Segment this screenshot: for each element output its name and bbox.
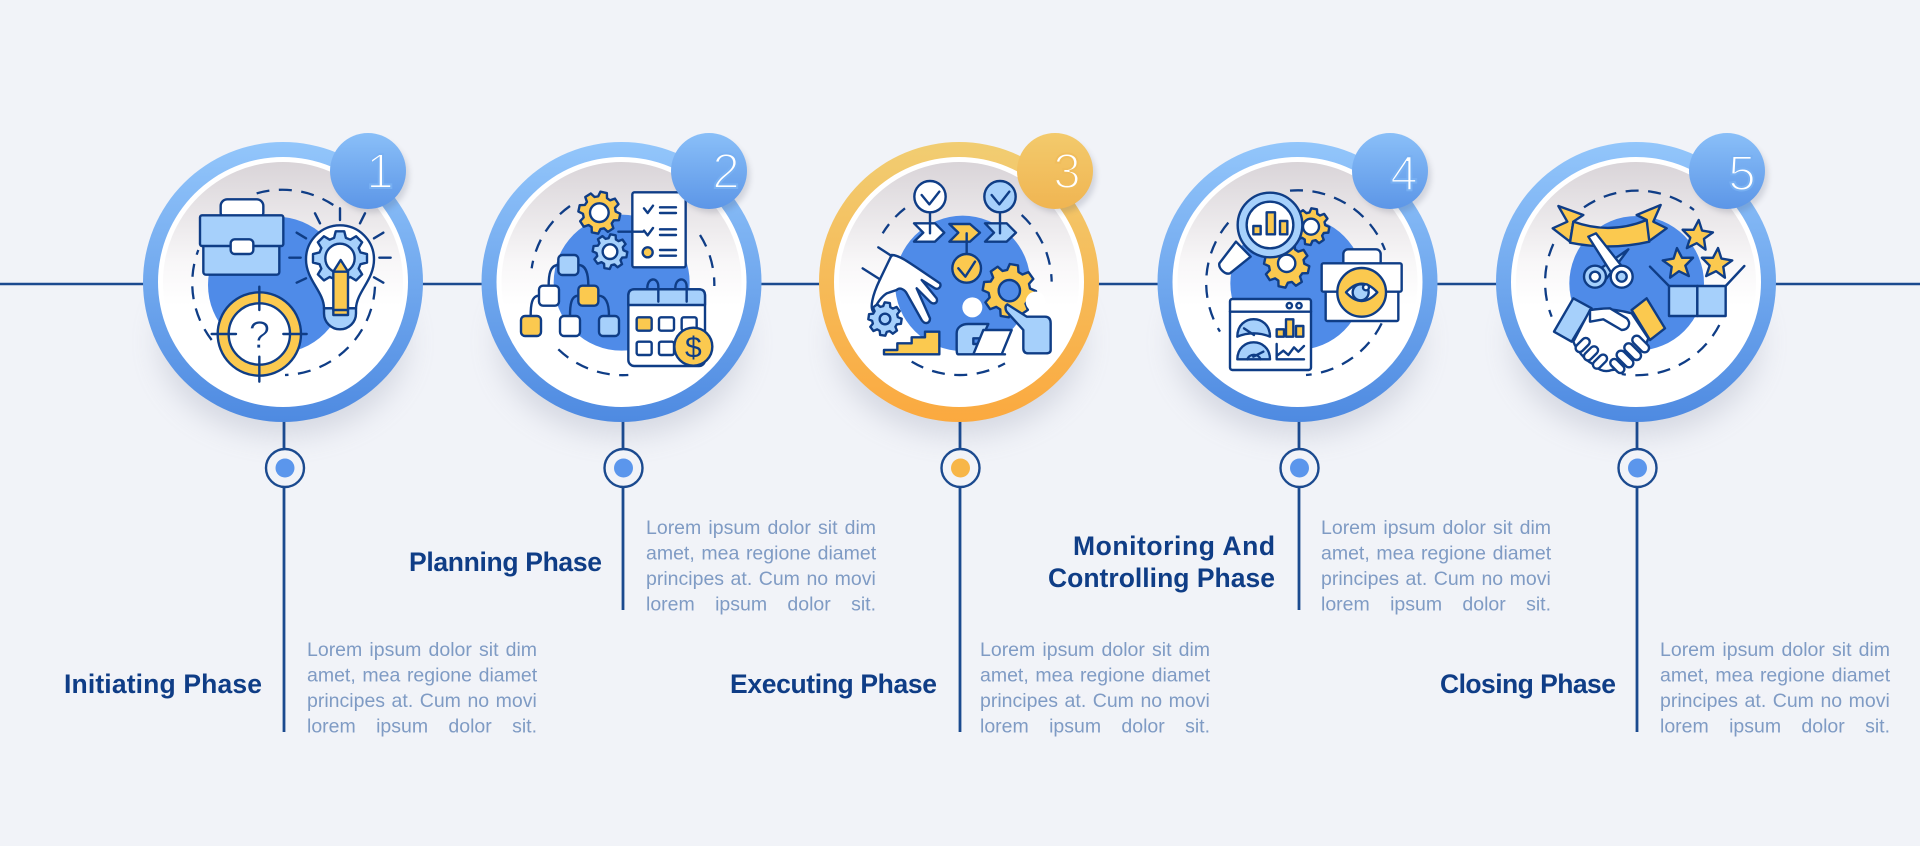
inner disc <box>158 157 408 407</box>
horizontal timeline line <box>0 283 1920 285</box>
icon: ribbon cutting, stars in box and handshake <box>1545 191 1744 375</box>
ring <box>1158 142 1438 422</box>
number badge 1 <box>330 133 409 213</box>
inner disc <box>1172 157 1422 407</box>
number badge 2 <box>671 133 750 213</box>
inner disc <box>1511 157 1761 407</box>
connector line and node <box>604 420 642 610</box>
heading: Controlling Phase <box>1048 563 1275 593</box>
icon: workflow, checklist and budget calendar <box>521 188 714 375</box>
panel: step 1 initiating phase <box>64 133 538 738</box>
body text: lorem ipsum dolor sit. <box>1321 594 1551 616</box>
body text: amet, mea regione diamet <box>1660 664 1891 686</box>
body text: lorem ipsum dolor sit. <box>1660 716 1890 738</box>
circle shadow <box>159 248 407 436</box>
body text: Lorem ipsum dolor sit dim <box>1321 517 1551 539</box>
body text: lorem ipsum dolor sit. <box>646 594 876 616</box>
panel: step 4 monitoring and controlling phase <box>1048 133 1552 616</box>
number badge 5: 5 <box>1728 147 1756 201</box>
icon: magnifier, dashboard and camera case <box>1206 190 1402 375</box>
body text: lorem ipsum dolor sit. <box>980 716 1210 738</box>
circle shadow <box>835 248 1083 436</box>
body text: principes at. Cum no movi <box>646 568 876 590</box>
circle shadow <box>1512 248 1760 436</box>
body text: Lorem ipsum dolor sit dim <box>1660 639 1890 661</box>
body text: principes at. Cum no movi <box>1321 568 1551 590</box>
circle shadow <box>498 248 746 436</box>
body text: amet, mea regione diamet <box>980 664 1211 686</box>
heading: Executing Phase <box>730 669 937 699</box>
body text: principes at. Cum no movi <box>1660 690 1890 712</box>
ring <box>819 142 1099 422</box>
icon: briefcase, bulb and target: ? <box>249 314 270 357</box>
body text: principes at. Cum no movi <box>307 690 537 712</box>
panel: step 5 closing phase <box>1440 133 1891 738</box>
heading: Monitoring And <box>1073 531 1275 561</box>
ring <box>1496 142 1776 422</box>
panel: step 2 planning phase <box>409 133 877 616</box>
connector line and node <box>1618 420 1656 732</box>
circle shadow <box>1174 248 1422 436</box>
panel: step 3 executing phase <box>730 133 1211 738</box>
connector line and node <box>942 420 980 732</box>
body text: amet, mea regione diamet <box>1321 542 1552 564</box>
connector line and node <box>266 420 304 732</box>
heading: Initiating Phase <box>64 669 262 699</box>
number badge 4 <box>1352 133 1431 213</box>
ring <box>143 142 423 422</box>
body text: Lorem ipsum dolor sit dim <box>307 639 537 661</box>
number badge 5 <box>1689 133 1768 213</box>
connector line and node <box>1280 420 1318 610</box>
number badge 1: 1 <box>366 145 394 199</box>
body text: Lorem ipsum dolor sit dim <box>980 639 1210 661</box>
number badge 3: 3 <box>1053 145 1081 199</box>
body text: lorem ipsum dolor sit. <box>307 716 537 738</box>
body text: principes at. Cum no movi <box>980 690 1210 712</box>
icon: workflow, checklist and budget calendar: $ <box>685 332 702 365</box>
body text: amet, mea regione diamet <box>646 542 877 564</box>
number badge 4: 4 <box>1390 147 1418 201</box>
heading: Closing Phase <box>1440 669 1616 699</box>
number badge 3 <box>1017 133 1096 213</box>
ring <box>482 142 762 422</box>
body text: Lorem ipsum dolor sit dim <box>646 517 876 539</box>
body text: amet, mea regione diamet <box>307 664 538 686</box>
inner disc <box>496 157 746 407</box>
number badge 2: 2 <box>712 145 740 199</box>
heading: Planning Phase <box>409 547 602 577</box>
icon: milestones, hand, team and gear <box>863 181 1052 375</box>
icon: briefcase, bulb and target <box>192 190 391 382</box>
inner disc <box>834 157 1084 407</box>
